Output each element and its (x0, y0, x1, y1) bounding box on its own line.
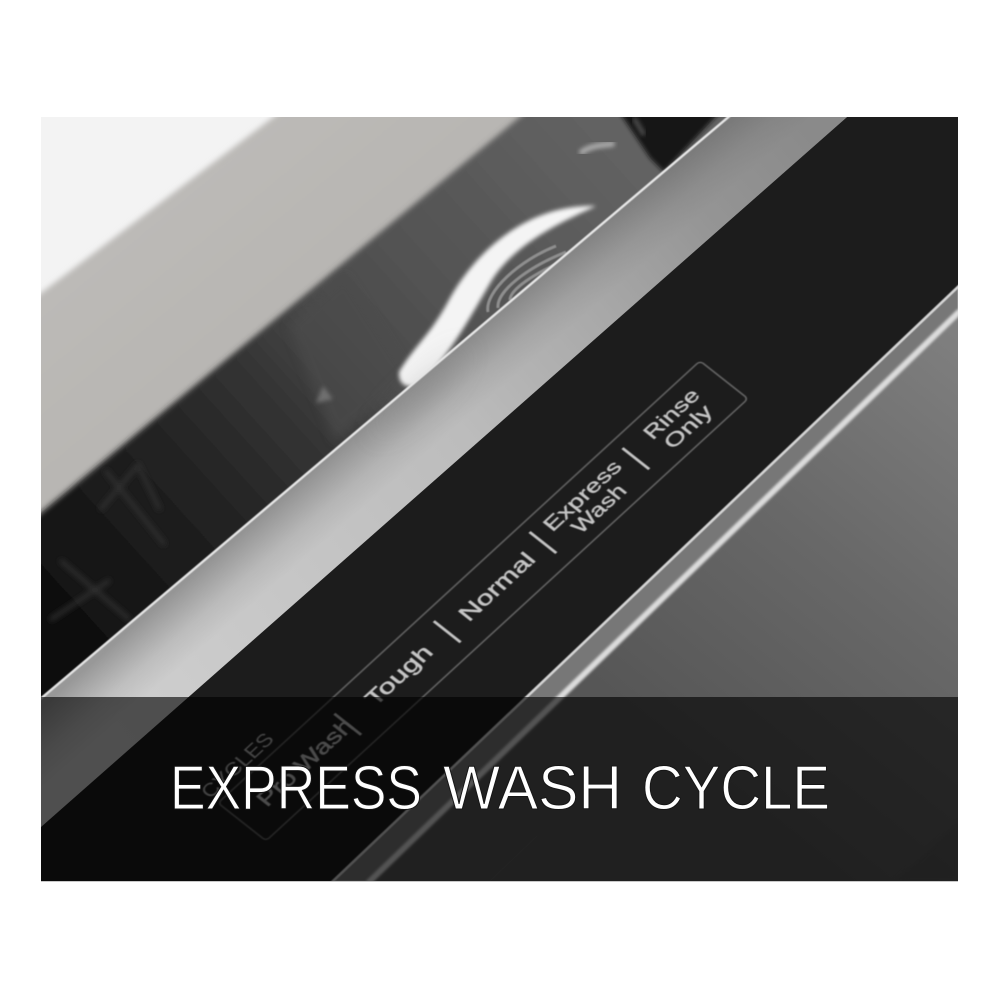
interior: bowl glare arc (399, 206, 596, 387)
lower corner texture (895, 822, 958, 881)
dishwasher interior (41, 117, 728, 698)
divider 2 (434, 621, 461, 642)
interior: plate shadow (312, 372, 352, 435)
faint panel seam (490, 836, 537, 881)
interior: rack tube (634, 118, 644, 135)
label: Rinse: Rinse (639, 385, 705, 444)
photo bottom edge (41, 880, 958, 882)
caption band (41, 697, 958, 881)
lower front panel (370, 313, 958, 881)
door edge: white line (38, 114, 732, 701)
product photo (20, 97, 960, 883)
label: Normal: Normal (453, 548, 541, 626)
title: EXPRESS (170, 754, 422, 823)
interior: rack wires (50, 463, 165, 620)
infographic canvas (41, 117, 958, 882)
control strip: chrome band (41, 117, 847, 827)
interior: bowl rim rings (488, 246, 570, 312)
divider 3 (530, 532, 556, 553)
chrome band: mid dark patch (407, 359, 438, 384)
label: Wash: Wash (567, 481, 632, 538)
door top edge: white (41, 117, 271, 292)
interior: small peg (316, 386, 333, 403)
door trim: grey band (41, 117, 524, 516)
panel edge: highlight (331, 285, 960, 883)
label: Express: Express (539, 457, 627, 536)
divider 4 (622, 448, 649, 469)
interior: small highlight (582, 144, 612, 152)
metal strip between lines (330, 287, 958, 881)
title: CYCLE (642, 754, 830, 823)
divider 1 (334, 714, 361, 735)
chrome band: shading near door (41, 117, 770, 748)
label: Tough: Tough (360, 641, 438, 710)
interior: dark rack corner (620, 117, 719, 172)
strip edge: bright line (368, 311, 960, 883)
label: CYCLES: CYCLES (197, 729, 279, 802)
title: WASH (443, 754, 622, 823)
label: Pro Wash: Pro Wash (251, 714, 359, 811)
cycle selector printed on panel (197, 345, 748, 842)
label: Only: Only (660, 402, 718, 453)
selector outline (218, 361, 748, 841)
control panel: black glass (41, 117, 958, 881)
